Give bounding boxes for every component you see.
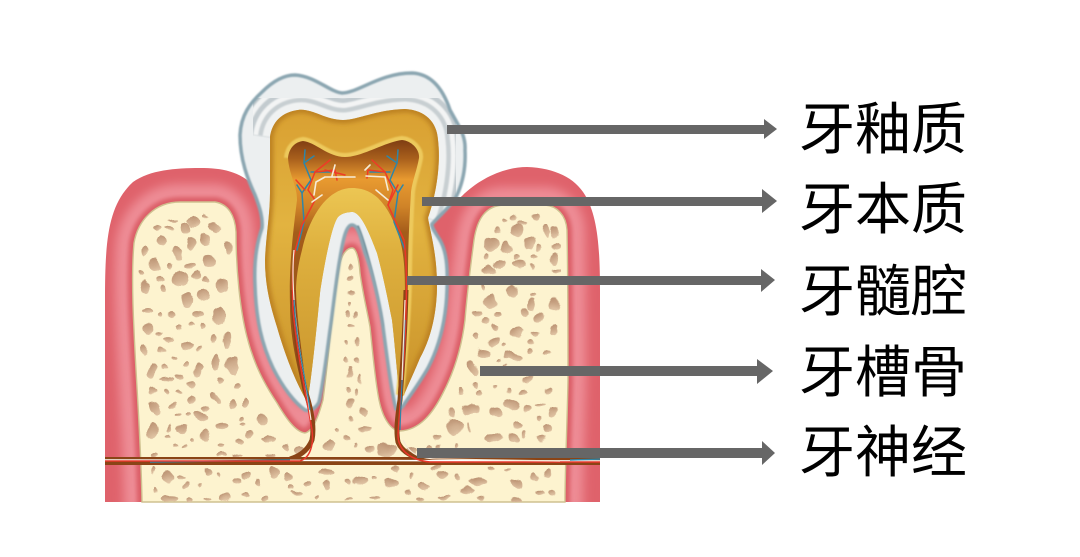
gum tissue (105, 167, 600, 510)
arrow: pulp cavity (407, 269, 775, 292)
tooth anatomy infographic (105, 70, 965, 503)
arrow: dentin (422, 189, 777, 213)
label: pulp cavity: 牙髓腔 (799, 260, 967, 323)
pulp cavity (288, 140, 419, 404)
dentin (265, 109, 439, 398)
label: dental nerve: 牙神经 (799, 421, 967, 484)
nerve bundle (105, 240, 600, 462)
alveolar bone (132, 202, 568, 503)
arrow: alveolar bone (480, 359, 773, 384)
blood vessels in pulp (294, 150, 405, 255)
label: alveolar bone: 牙槽骨 (799, 341, 967, 404)
inner dentin arch (296, 188, 405, 398)
arrow: nerve (417, 441, 775, 465)
tooth enamel (240, 73, 465, 411)
label: enamel: 牙釉质 (799, 98, 967, 161)
label: dentin: 牙本质 (799, 178, 967, 241)
arrow: enamel (447, 119, 777, 139)
